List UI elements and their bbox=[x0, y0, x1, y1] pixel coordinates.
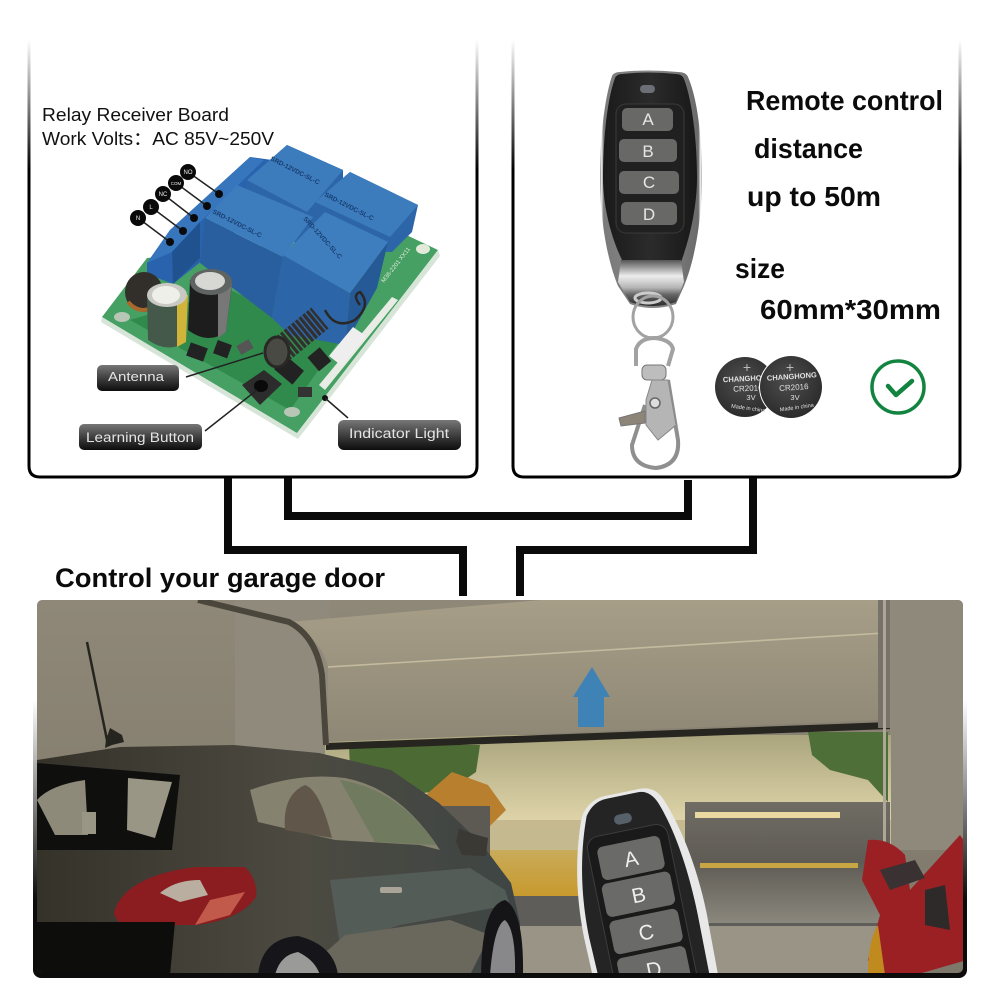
text: remote control distance: up to 50m bbox=[747, 181, 881, 212]
callout: learning button: Learning Button bbox=[86, 430, 194, 445]
callout: indicator light bbox=[325, 398, 461, 450]
tree: green right bbox=[808, 732, 888, 802]
remote in front of the scene bbox=[577, 788, 718, 973]
motorcycle bbox=[862, 835, 967, 975]
remote button A bbox=[596, 835, 666, 881]
battery front: CR2016 bbox=[779, 382, 809, 393]
terminal pin labels: L bbox=[149, 205, 153, 211]
relay: front right bbox=[345, 242, 388, 345]
car antenna bbox=[87, 642, 124, 748]
callout: antenna: Antenna bbox=[108, 369, 165, 384]
tree: green left bbox=[349, 745, 480, 795]
button C: C bbox=[643, 173, 655, 192]
text: size: size bbox=[735, 253, 785, 284]
relay: front left bbox=[200, 218, 283, 318]
heading: control your garage door: Control your garage door bbox=[55, 563, 385, 593]
relay markings: SRD-12VDC-SL-C bbox=[269, 156, 321, 187]
button B bbox=[619, 139, 677, 162]
green capacitor bbox=[147, 283, 188, 348]
remote button B: B bbox=[630, 883, 648, 908]
remote chrome shell bbox=[600, 70, 702, 308]
remote button A: A bbox=[622, 847, 640, 872]
battery front: CHANGHONG bbox=[767, 370, 817, 383]
relay markings: SRD-12VDC-SL-C bbox=[323, 192, 375, 223]
battery front: + bbox=[786, 359, 794, 375]
button A: A bbox=[642, 110, 654, 129]
icon: key fob remote bbox=[600, 70, 702, 468]
car door handle bbox=[380, 887, 402, 893]
battery back: CR2016 bbox=[733, 383, 763, 394]
battery back: 3V bbox=[746, 393, 756, 402]
indicator LED bbox=[322, 395, 328, 401]
icon: CR2016 coin batteries bbox=[715, 356, 822, 418]
terminal pin labels: COM bbox=[171, 181, 182, 186]
panel: relay receiver board bbox=[29, 40, 477, 477]
inductor bbox=[125, 272, 163, 312]
text: remote control distance bbox=[746, 85, 943, 212]
text: remote control distance: distance bbox=[754, 133, 863, 164]
text: size bbox=[735, 253, 941, 325]
view outside the door bbox=[325, 732, 891, 976]
relay markings: SRD-12VDC-SL-C bbox=[302, 216, 343, 261]
black capacitor bbox=[188, 269, 232, 338]
callout: indicator light: Indicator Light bbox=[349, 426, 449, 441]
blue screw terminal bbox=[147, 157, 272, 284]
remote chrome tail bbox=[618, 260, 684, 306]
board model text: M36-2201 XX11 bbox=[381, 246, 412, 284]
circuit board base bbox=[102, 232, 438, 433]
button B: B bbox=[642, 142, 654, 161]
concrete gate wall bbox=[685, 802, 890, 923]
wire: relay to garage bbox=[228, 478, 463, 596]
battery front bbox=[760, 356, 822, 418]
blue up arrow bbox=[573, 667, 610, 727]
text: remote control distance: Remote control bbox=[746, 85, 943, 116]
remote LED bbox=[614, 813, 632, 825]
callout: antenna bbox=[97, 353, 263, 391]
LED bbox=[640, 85, 655, 93]
key ring and clasp bbox=[619, 293, 678, 468]
relay: back left bbox=[247, 145, 343, 250]
car rear window bbox=[37, 763, 180, 850]
RF module strip bbox=[319, 297, 398, 390]
garage walls bbox=[37, 600, 967, 980]
remote black body bbox=[603, 72, 697, 262]
wire: relay to remote bbox=[288, 478, 688, 516]
connecting wires bbox=[228, 478, 753, 596]
door rail bbox=[198, 600, 326, 745]
battery back: + bbox=[743, 359, 751, 375]
battery back bbox=[715, 357, 767, 417]
text: size: 60mm*30mm bbox=[760, 294, 941, 325]
remote button D: D bbox=[644, 957, 664, 983]
text: relay receiver specification bbox=[42, 105, 274, 149]
panel: remote control bbox=[513, 40, 960, 477]
terminal pin labels: N bbox=[136, 216, 140, 222]
battery back: Made in china bbox=[731, 404, 766, 414]
car tail light bbox=[114, 867, 256, 925]
tree: orange bbox=[420, 772, 506, 826]
button C bbox=[619, 171, 679, 194]
battery back: CHANGHONG bbox=[723, 373, 773, 384]
button D bbox=[621, 202, 677, 225]
remote shell bbox=[577, 788, 718, 973]
car mirror bbox=[456, 828, 488, 856]
garage door bbox=[294, 600, 890, 842]
car side window bbox=[250, 776, 440, 850]
car front wheel bbox=[481, 900, 523, 975]
terminal pin labels: NO bbox=[184, 170, 193, 176]
car lower shadow bbox=[37, 922, 175, 975]
terminal pin labels bbox=[130, 164, 223, 246]
battery front: 3V bbox=[790, 393, 800, 402]
wire: remote to garage bbox=[520, 478, 753, 596]
remote face bbox=[582, 792, 710, 973]
relay markings: SRD-12VDC-SL-C bbox=[211, 209, 263, 240]
car body bbox=[37, 745, 520, 975]
button D: D bbox=[643, 205, 655, 224]
car rear wheel bbox=[258, 936, 338, 975]
photo: garage interior with car bbox=[33, 600, 967, 1000]
text: relay receiver specification: Work Volts：AC 85V~250V bbox=[42, 129, 274, 149]
callout: learning button bbox=[79, 390, 257, 450]
relay markings bbox=[211, 156, 375, 261]
remote button B bbox=[601, 871, 676, 918]
small components bbox=[186, 339, 331, 397]
remote button C bbox=[608, 908, 684, 955]
text: relay receiver specification: Relay Receiver Board bbox=[42, 105, 229, 125]
image: relay circuit board bbox=[101, 145, 440, 439]
button A bbox=[622, 108, 673, 131]
car body reflections bbox=[327, 868, 510, 973]
battery front: Made in china bbox=[779, 403, 815, 413]
antenna coil bbox=[265, 292, 365, 367]
terminal pin labels: NC bbox=[159, 192, 168, 198]
relay: back right bbox=[315, 172, 418, 252]
icon: green check mark bbox=[872, 361, 924, 413]
remote button D bbox=[617, 946, 690, 973]
remote button C: C bbox=[637, 920, 656, 946]
learning button switch bbox=[242, 370, 282, 405]
